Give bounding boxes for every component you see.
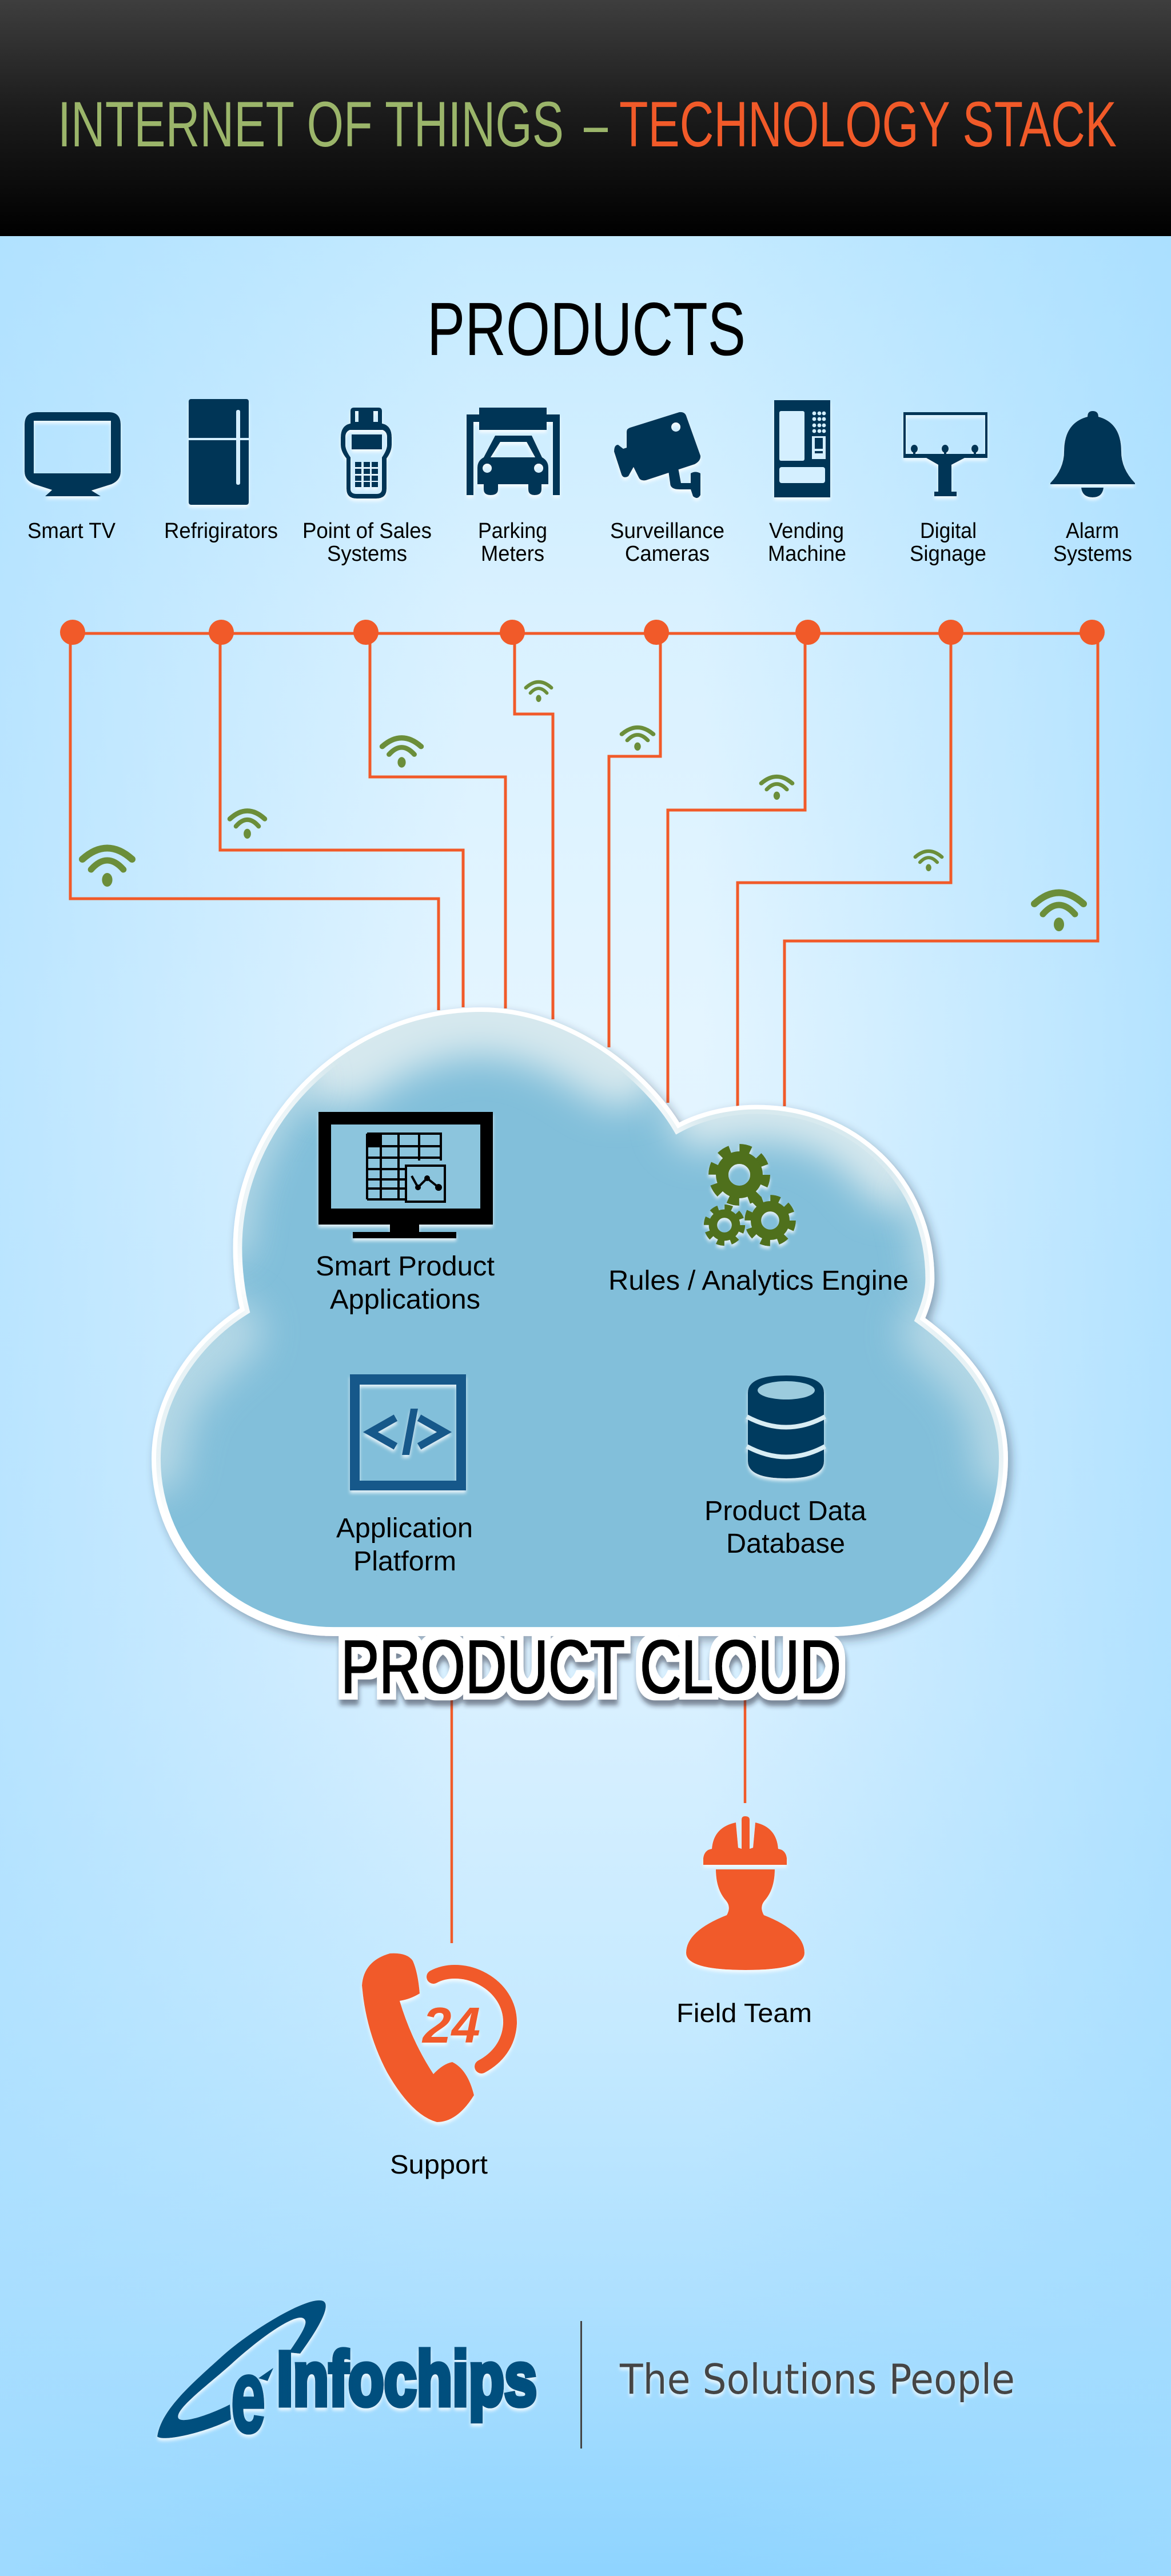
icon: refrigerator [189, 399, 249, 505]
label: rules analytics engine: Rules / Analytics Engine [608, 1266, 909, 1296]
logo: eInfochips: Infochips [277, 2336, 537, 2422]
product labels: Meters [481, 542, 544, 566]
logo: eInfochips [157, 2300, 537, 2454]
icon: wifi 7 [915, 851, 942, 871]
icon: wifi 2 [230, 811, 265, 839]
panel: product cloud [152, 1007, 1008, 1632]
icon: 24 hour support phone [362, 1953, 510, 2122]
icon: code window [350, 1374, 466, 1490]
product labels: Parking [478, 519, 547, 543]
icon: wifi 8 [1034, 893, 1084, 931]
cloud shape [152, 1007, 1008, 1632]
icon: field team worker [686, 1816, 804, 1970]
icon: gears [707, 1148, 792, 1243]
product labels: Point of Sales [302, 519, 432, 543]
heading: product cloud: PRODUCT CLOUD [341, 1625, 841, 1709]
icon: wifi 5 [622, 727, 654, 751]
label: field team: Field Team [676, 1998, 812, 2028]
tagline: The Solutions People [619, 2355, 1015, 2403]
product labels: Systems [327, 542, 407, 566]
product labels: Smart TV [27, 519, 116, 543]
icon: analytics monitor [318, 1112, 493, 1238]
product labels: Cameras [625, 542, 710, 566]
connector lines from products to cloud [70, 632, 1098, 1106]
icon: wifi 1 [82, 848, 132, 887]
product labels: Machine [768, 542, 846, 566]
label: application platform [336, 1513, 473, 1577]
product labels: Alarm [1066, 519, 1119, 543]
label: product data database: Product Data [704, 1496, 866, 1526]
product labels: Systems [1053, 542, 1132, 566]
icon: surveillance camera [614, 412, 700, 498]
product labels [27, 519, 1132, 566]
connector lines to support teams [452, 1686, 745, 1943]
icon: wifi 6 [761, 776, 792, 800]
label: smart product applications [316, 1251, 495, 1315]
icon: point of sales terminal [341, 408, 392, 499]
connection nodes [60, 620, 1105, 645]
label: application platform: Application [336, 1513, 473, 1544]
wifi icons [82, 682, 1084, 931]
divider [580, 2321, 582, 2449]
label: smart product applications: Applications [330, 1285, 480, 1315]
label: smart product applications: Smart Product [316, 1251, 495, 1282]
product labels: Refrigirators [164, 519, 278, 543]
icon: digital signage [903, 412, 987, 496]
icon: 24 hour support phone: 24 [421, 1997, 480, 2053]
product labels: Surveillance [610, 519, 724, 543]
product labels: Vending [769, 519, 844, 543]
icon: vending machine [774, 400, 830, 497]
products row [25, 399, 1135, 505]
label: application platform: Platform [353, 1546, 456, 1577]
icon: wifi 4 [526, 682, 551, 702]
heading: products: PRODUCTS [427, 287, 746, 371]
icon: smart tv [25, 412, 121, 496]
label: product data database [704, 1496, 866, 1559]
icon: database [747, 1375, 825, 1478]
title [58, 89, 1117, 160]
icon: alarm bell [1050, 411, 1135, 497]
label: support: Support [390, 2150, 488, 2179]
label: product data database: Database [726, 1529, 845, 1559]
title: – [584, 89, 608, 160]
logo: eInfochips: e [231, 2338, 265, 2454]
icon: wifi 3 [383, 738, 421, 768]
title: INTERNET OF THINGS [58, 89, 564, 160]
product labels: Digital [920, 519, 977, 543]
header band [0, 0, 1171, 236]
icon: parking meter garage [467, 408, 560, 495]
product labels: Signage [910, 542, 986, 566]
